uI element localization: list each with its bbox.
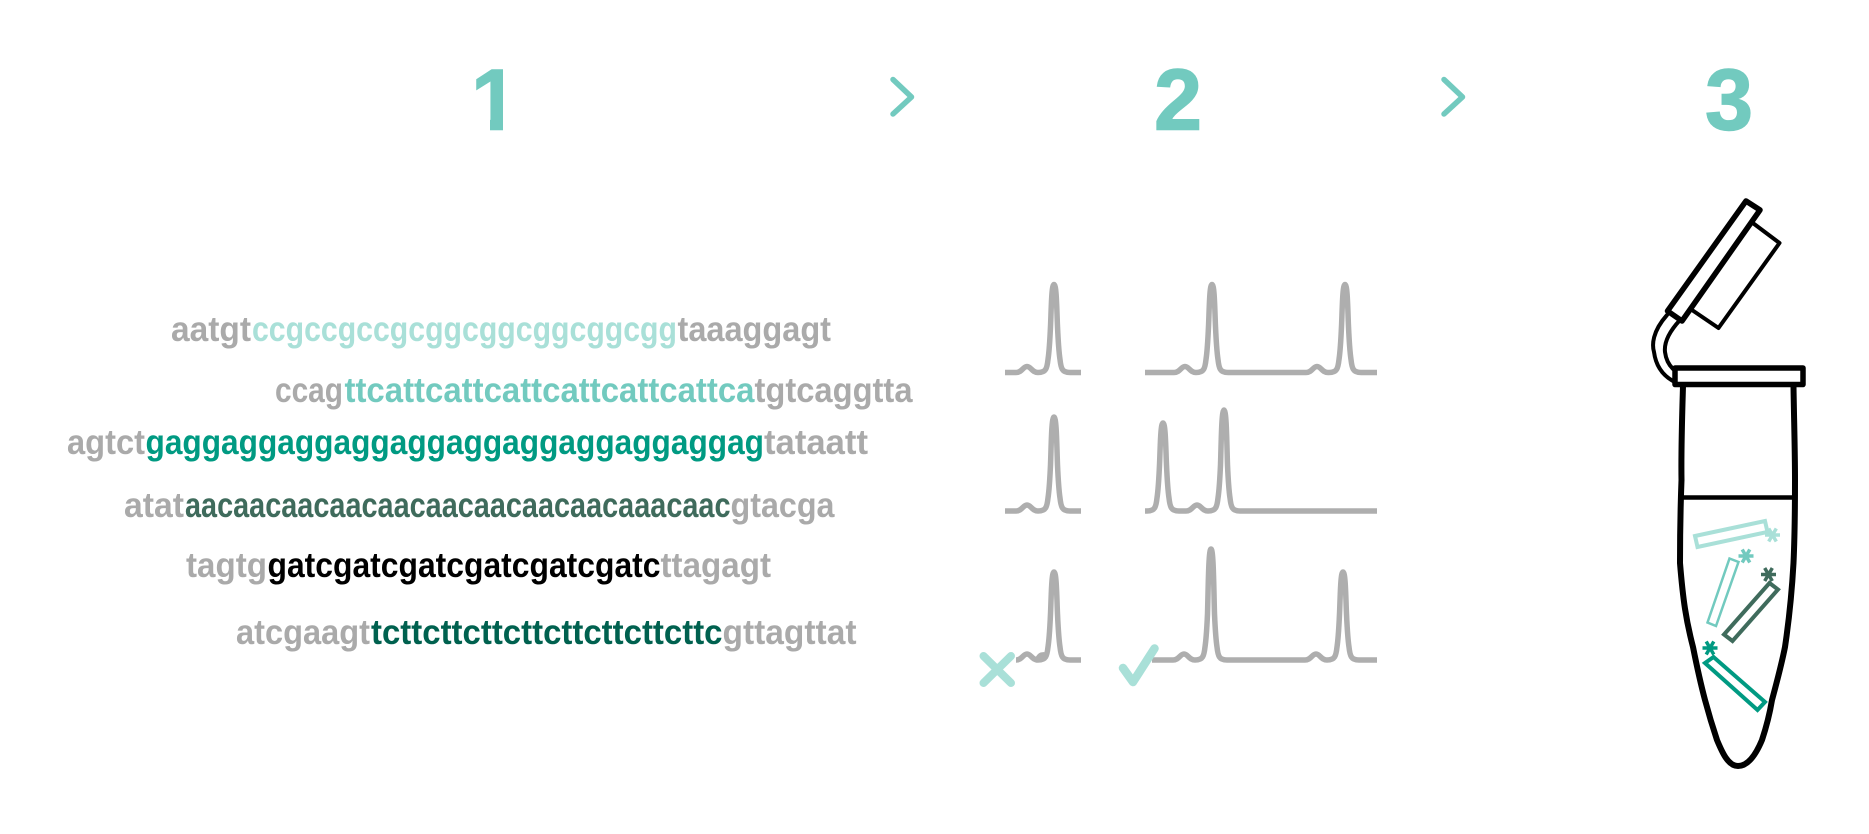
DNA fragment: mid teal: [1708, 550, 1754, 626]
infographic: [68, 68, 1806, 769]
panel: electropherograms: [984, 284, 1377, 683]
trace: row 2, single sample: [1005, 417, 1081, 511]
sequence line 6: tct repeat: atcgaagt: [236, 613, 370, 652]
sequence line 2: ttca repeat: ttcattcattcattcattcattcattca: [344, 371, 755, 410]
sequence line 1: ccg/cgg repeat: ccgccgccgcggcggcggcggcgg: [252, 310, 677, 349]
sequence line 5: gatc repeat: tagtg: [186, 546, 267, 585]
tube rim: [1675, 368, 1803, 384]
icon: accepted check: [1123, 648, 1154, 682]
panel: PCR tube: [1653, 201, 1803, 766]
sequence line 4: aac repeat: aacaacaacaacaacaacaacaacaacaaacaac: [185, 486, 730, 525]
step number 3: 3: [1705, 52, 1753, 148]
trace: row 3, rejected sample: [1016, 572, 1081, 660]
tube lid plug: [1692, 224, 1780, 328]
tube hinge: [1653, 315, 1680, 381]
DNA fragment: green: [1702, 642, 1765, 710]
sequence line 4: aac repeat: atat: [124, 486, 184, 525]
sequence line 6: tct repeat: gttagttat: [722, 613, 857, 652]
sequence line 6: tct repeat: [236, 613, 857, 652]
sequence line 3: gag repeat: gaggaggaggaggaggaggaggaggaggaggag: [146, 423, 764, 462]
arrow: step 1 to 2: [893, 80, 912, 114]
DNA fragment: dark: [1724, 568, 1778, 641]
trace: row 2, two alleles: [1145, 410, 1377, 511]
sequence line 3: gag repeat: tataatt: [764, 423, 868, 462]
sequence line 1: ccg/cgg repeat: aatgt: [171, 310, 251, 349]
arrow: step 2 to 3: [1444, 80, 1462, 114]
trace: row 1, single sample: [1005, 284, 1081, 372]
liquid level line: [1683, 495, 1793, 500]
tube lid bar: [1668, 201, 1760, 321]
sequence line 5: gatc repeat: gatcgatcgatcgatcgatcgatc: [268, 546, 660, 585]
trace: row 1, two alleles: [1145, 284, 1377, 372]
DNA fragment: pale: [1695, 521, 1780, 547]
panel: DNA sequences: [67, 310, 913, 652]
icon: rejected cross: [984, 656, 1011, 683]
sequence line 2: ttca repeat: [275, 371, 913, 410]
trace: row 3, accepted sample: [1152, 549, 1377, 660]
sequence line 5: gatc repeat: ttagagt: [660, 546, 771, 585]
sequence line 2: ttca repeat: tgtcaggtta: [754, 371, 913, 410]
sequence line 6: tct repeat: tcttcttcttcttcttcttcttcttc: [371, 613, 722, 652]
sequence line 2: ttca repeat: ccag: [275, 371, 343, 410]
tube body: [1680, 386, 1795, 766]
sequence line 3: gag repeat: agtct: [67, 423, 145, 462]
step number 1: 1: [471, 52, 519, 148]
sequence line 1: ccg/cgg repeat: taaaggagt: [678, 310, 831, 349]
sequence line 4: aac repeat: gtacga: [730, 486, 835, 525]
step number 2: 2: [1154, 52, 1202, 148]
